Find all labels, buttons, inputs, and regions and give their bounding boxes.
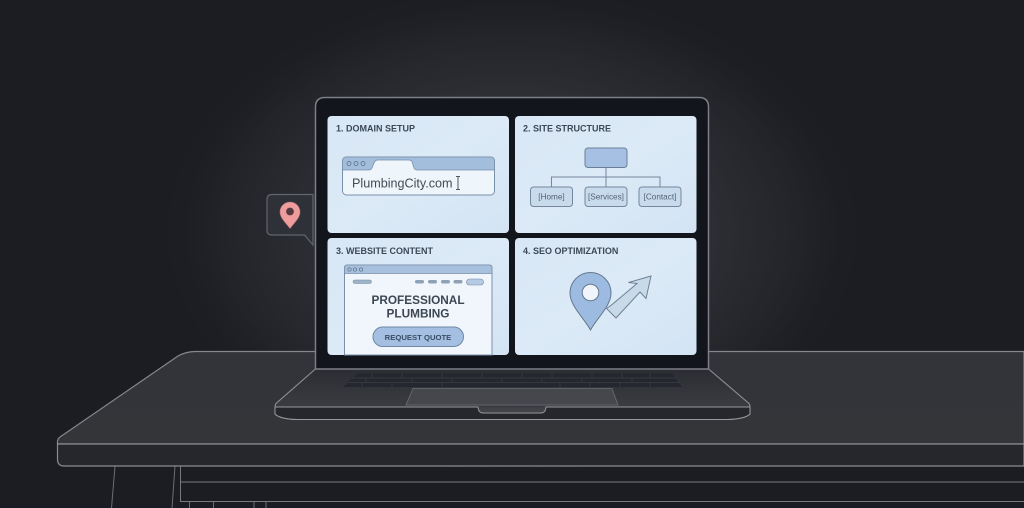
desk legs and drawers [112,466,1024,508]
trackpad [406,388,618,405]
desk top surface [57,352,1024,444]
icon: text cursor [456,176,460,190]
site tree: [Services] [588,192,624,202]
browser address bar: PlumbingCity.com [352,176,453,190]
desk [57,352,1024,508]
laptop [275,98,750,420]
location bubble [267,194,313,245]
site tree: [Home] [538,192,565,202]
web page mockup: REQUEST QUOTE [385,333,451,342]
web page mockup: PLUMBING [387,306,449,320]
web page mockup: PROFESSIONAL [371,293,465,307]
desk front edge [58,444,1024,466]
icon: map pin [570,272,611,330]
icon: location pin [280,202,300,228]
heading: 4. SEO OPTIMIZATION [523,246,618,256]
heading: 2. SITE STRUCTURE [523,124,611,134]
button [373,327,464,346]
notch [479,408,545,412]
site tree [530,148,681,206]
panel: seo optimization [515,238,696,355]
panel: domain setup [328,116,509,233]
heading: 3. WEBSITE CONTENT [336,246,434,256]
heading: 1. DOMAIN SETUP [336,124,415,134]
panel: website content [328,238,509,355]
laptop base [275,368,750,420]
panel: site structure [515,116,696,233]
web page mockup [344,265,492,355]
keyboard [343,374,682,387]
laptop lid [316,98,708,369]
icon: growth arrow [606,276,651,318]
site tree: [Contact] [644,192,676,202]
browser address bar [342,157,494,195]
